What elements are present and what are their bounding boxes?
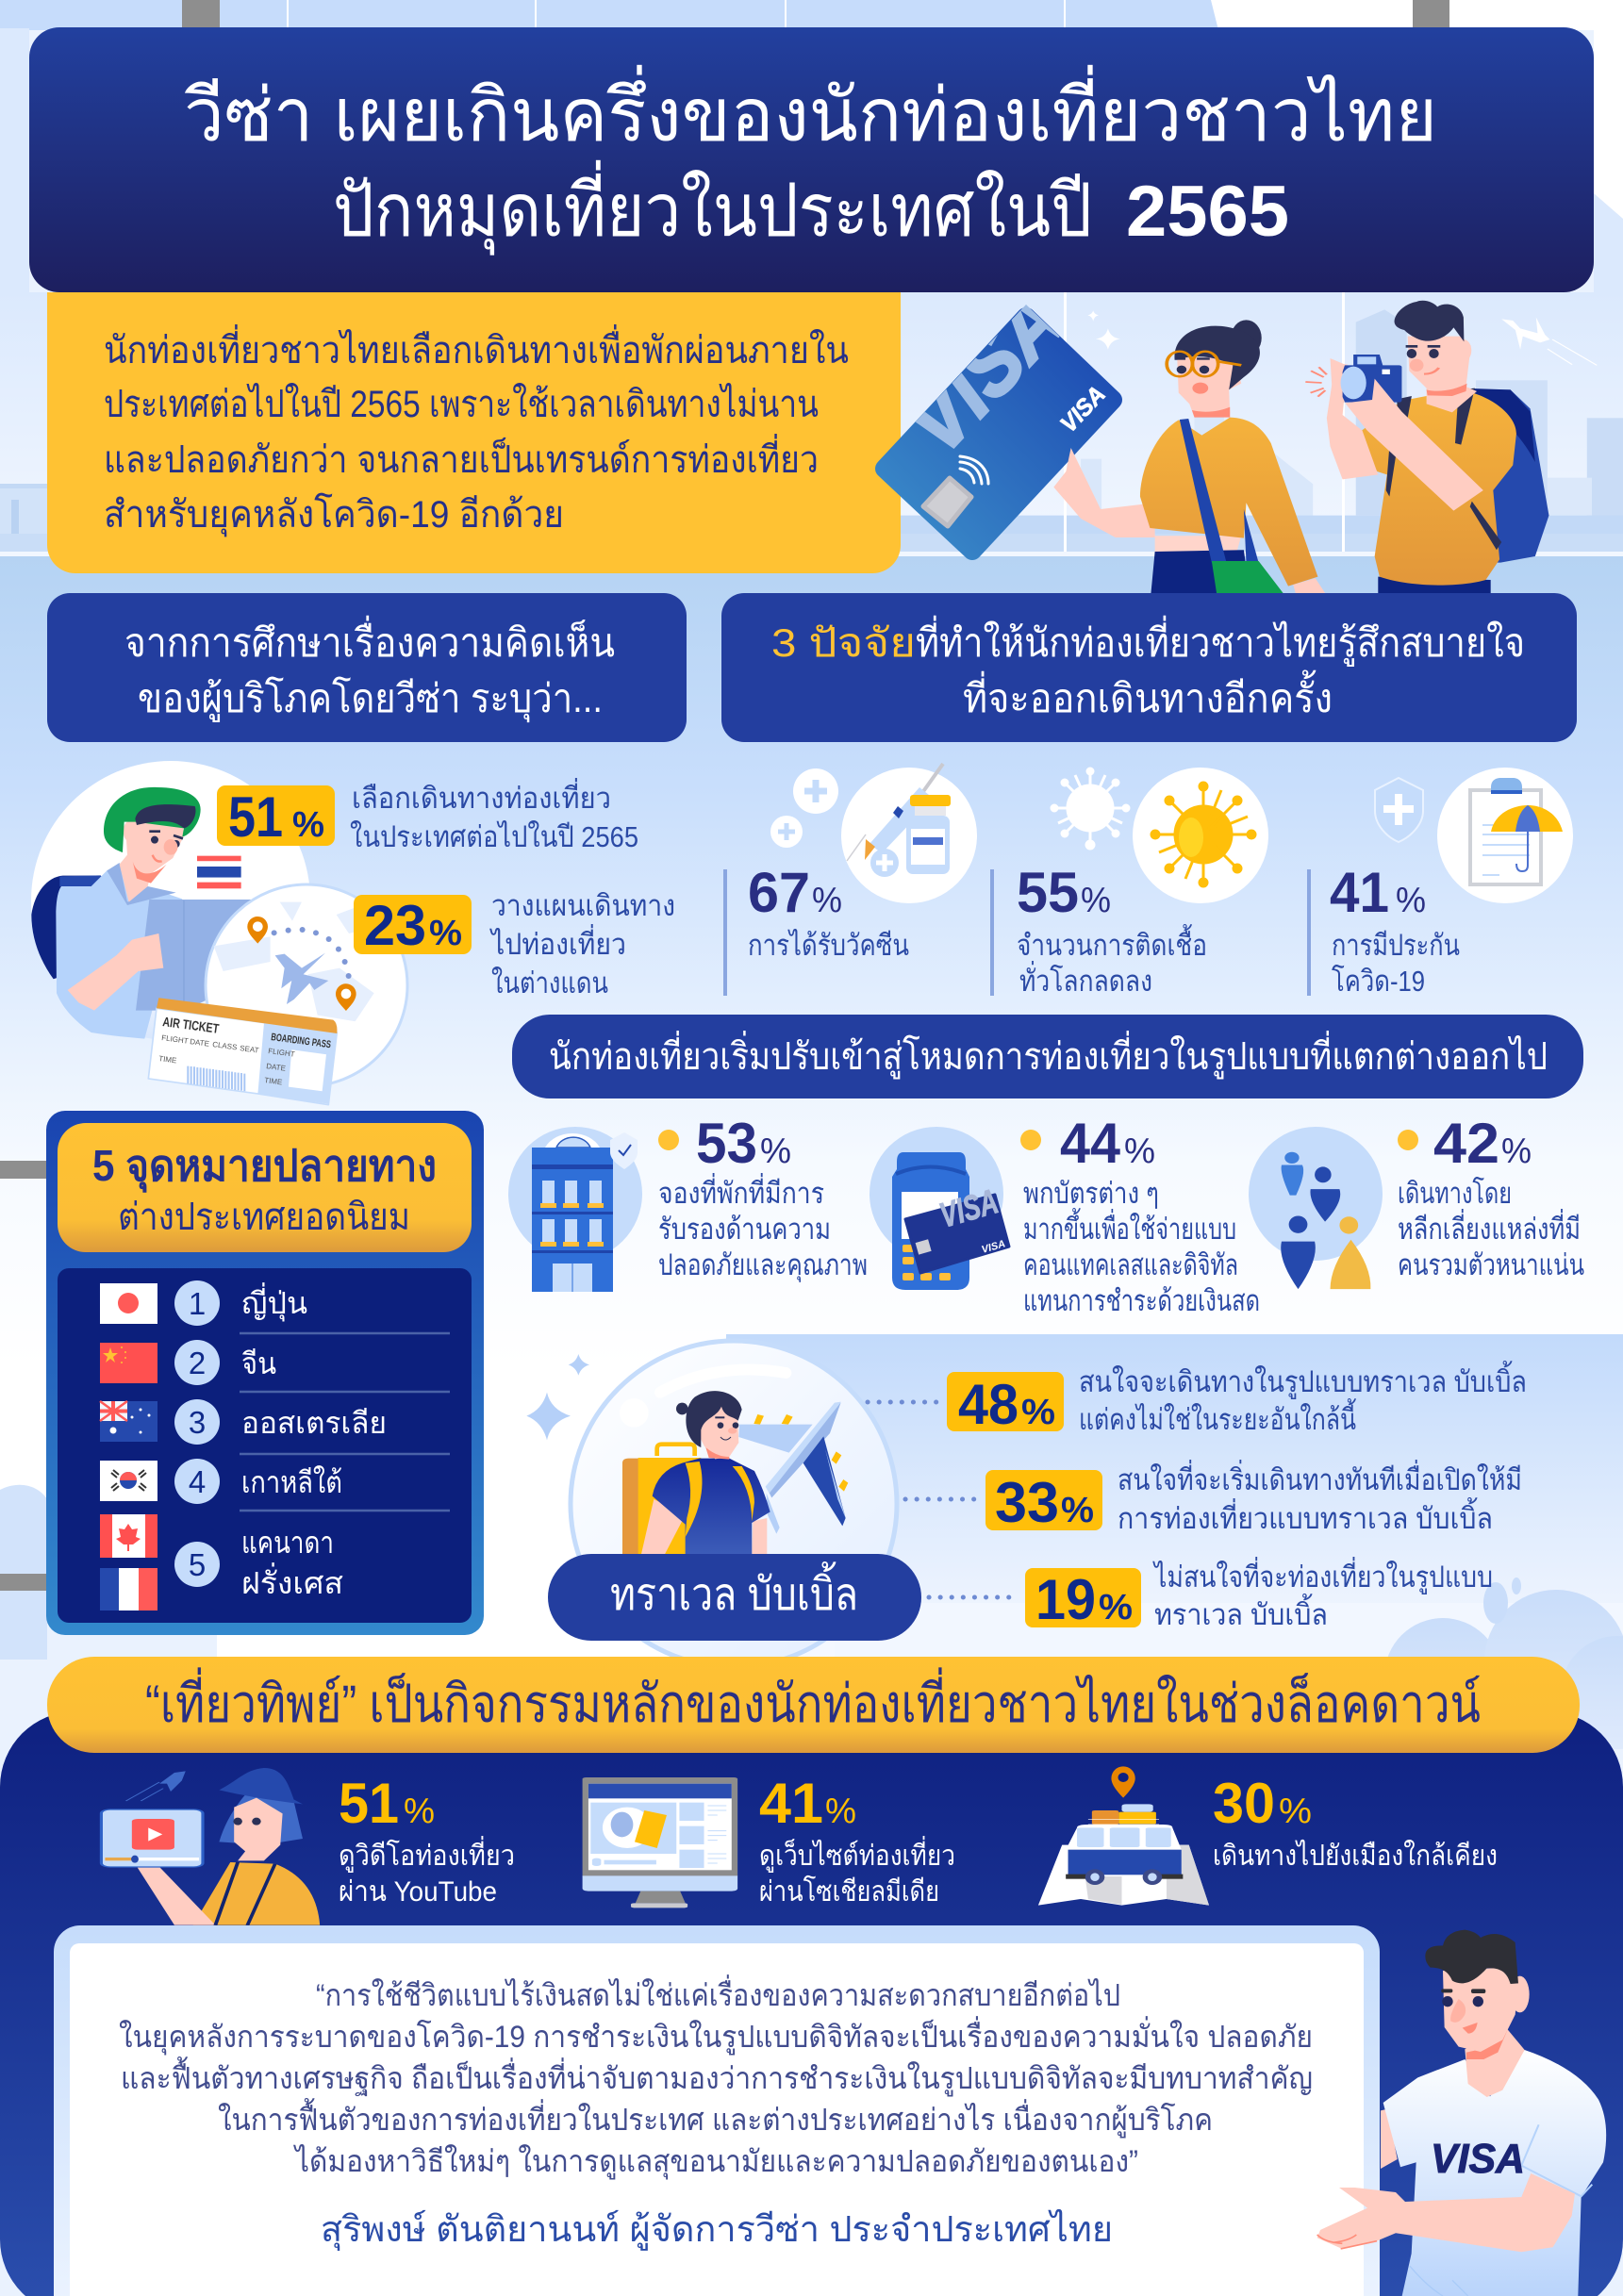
intro text: นักท่องเที่ยวชาวไทยเลือกเดินทางเพื่อพักผ่อนภายใน <box>104 324 849 372</box>
illustration: air ticket: SEAT <box>240 1044 259 1055</box>
label: travel bubble <box>548 1554 921 1641</box>
stat: 51% youtube: ดูวิดีโอท่องเที่ยว <box>339 1836 515 1873</box>
stat: 51% domestic <box>217 778 638 853</box>
illustration: air ticket: FLIGHT <box>161 1033 189 1046</box>
stat: 30% nearby cities: % <box>1279 1792 1312 1831</box>
stat: 33% immediately: สนใจที่จะเริ่มเดินทางทันทีเมื่อเปิดให้มี <box>1118 1460 1522 1496</box>
title year: 2565 <box>1126 172 1289 252</box>
rank 2: 2 <box>189 1346 206 1380</box>
quote text: และฟื้นตัวทางเศรษฐกิจ ถือเป็นเรื่องที่น่าจับตามองว่าการชำระเงินในรูปแบบดิจิทัลจะมีบทบาทสำคัญ <box>121 2056 1313 2097</box>
heading: 3 factors: 3 ปัจจัย <box>771 620 916 665</box>
illustration: air ticket: TIME <box>158 1054 177 1065</box>
card chip <box>923 478 971 526</box>
icon: van on map <box>1038 1766 1209 1906</box>
quote text: “การใช้ชีวิตแบบไร้เงินสดไม่ใช่แค่เรื่องของความสะดวกสบายอีกต่อไป <box>316 1974 1120 2012</box>
stat: 44% contactless: แทนการชำระด้วยเงินสด <box>1023 1284 1260 1317</box>
illustration: air ticket: BOARDING PASS <box>271 1032 332 1050</box>
stat: 19% not interested <box>929 1557 1493 1631</box>
title banner <box>29 27 1594 292</box>
stat: 53% certified stays: ปลอดภัยและคุณภาพ <box>658 1248 868 1283</box>
stat: 67% vaccinated: การได้รับวัคซีน <box>748 929 909 962</box>
icon: vaccine <box>770 764 977 903</box>
stat: 55% infections down <box>990 861 1207 998</box>
rank 4 <box>174 1459 220 1504</box>
icon: payment terminal <box>869 1127 1009 1290</box>
quote attribution: สุริพงษ์ ตันติยานนท์ ผู้จัดการวีซ่า ประจำประเทศไทย <box>321 2209 1113 2251</box>
quote text: ได้มองหาวิธีใหม่ๆ ในการดูแลสุขอนามัยและความปลอดภัยของตนเอง” <box>292 2144 1138 2180</box>
stat: 33% immediately: 33 <box>995 1471 1059 1534</box>
country names: ญี่ปุ่น <box>241 1282 307 1322</box>
country names: จีน <box>241 1346 276 1380</box>
icon: people distancing <box>1249 1127 1383 1289</box>
destinations heading <box>58 1123 472 1252</box>
icon: insurance <box>1375 768 1573 903</box>
stat: 44% contactless: มากขึ้นเพื่อใช้จ่ายแบบ <box>1023 1208 1236 1246</box>
stat: 51% domestic: ในประเทศต่อไปในปี 2565 <box>350 820 638 853</box>
stat: 55% infections down: จำนวนการติดเชื้อ <box>1017 924 1207 962</box>
icon: viruses <box>1051 768 1268 903</box>
destinations heading: 5 จุดหมายปลายทาง <box>92 1141 437 1193</box>
rank 4: 4 <box>189 1464 206 1499</box>
rank 5: 5 <box>189 1547 206 1582</box>
stat: 67% vaccinated <box>723 861 909 996</box>
icon: yellow virus <box>1151 782 1256 887</box>
quote text <box>119 1974 1313 2180</box>
panel: intro <box>47 292 901 573</box>
stat: 48% later: 48 <box>958 1373 1019 1436</box>
contactless waves <box>960 456 988 484</box>
stat: 42% avoid crowds: หลีกเลี่ยงแหล่งที่มี <box>1398 1209 1581 1246</box>
intro text <box>104 324 849 537</box>
intro text: และปลอดภัยกว่า จนกลายเป็นเทรนด์การท่องเที่ยว <box>104 434 819 481</box>
bottom navy panel <box>0 1711 1623 2296</box>
stat: 23% abroad: % <box>429 914 462 953</box>
stat: 42% avoid crowds: 42 <box>1433 1112 1499 1175</box>
stat: 55% infections down: 55 <box>1017 861 1079 924</box>
stat: 53% certified stays <box>658 1112 868 1283</box>
flag: France <box>100 1568 157 1611</box>
stat: 42% avoid crowds <box>1398 1112 1584 1281</box>
illustration: travel bubble <box>526 1341 897 1667</box>
icon: white virus <box>1051 768 1130 850</box>
stat: 51% youtube: % <box>404 1792 435 1831</box>
destinations list <box>58 1268 472 1623</box>
illustration: air ticket <box>148 998 337 1105</box>
icon: payment terminal: VISA <box>936 1181 1002 1235</box>
heading: consumer study: ของผู้บริโภคโดยวีซ่า ระบุว่า... <box>138 675 603 723</box>
illustration: visa presenter <box>1317 1930 1606 2296</box>
stat: 53% certified stays: 53 <box>696 1112 757 1175</box>
stat: 44% contactless: คอนแทคเลสและดิจิทัล <box>1023 1248 1238 1281</box>
flag: Australia <box>100 1401 157 1442</box>
stat: 41% websites: % <box>825 1792 856 1831</box>
intro text: ประเทศต่อไปในปี 2565 เพราะใช้เวลาเดินทางไม่นาน <box>104 382 819 425</box>
stat: 48% later: แต่คงไม่ใช่ในระยะอันใกล้นี้ <box>1079 1398 1356 1436</box>
stat: 30% nearby cities: เดินทางไปยังเมืองใกล้เคียง <box>1213 1839 1498 1872</box>
stat: 30% nearby cities <box>1213 1772 1498 1872</box>
panel: quote <box>54 1925 1380 2296</box>
illustration: woman with glasses <box>1053 320 1325 593</box>
country names: ฝรั่งเศส <box>241 1562 343 1600</box>
heading: virtual travel <box>47 1657 1580 1753</box>
rank 2 <box>174 1340 220 1385</box>
stat: 33% immediately: การท่องเที่ยวแบบทราเวล บับเบิ้ล <box>1118 1497 1493 1535</box>
stat: 53% certified stays: % <box>760 1131 791 1171</box>
stat: 51% domestic: % <box>292 805 324 845</box>
stat: 23% abroad <box>354 889 675 999</box>
stat: 51% youtube <box>339 1772 515 1908</box>
stat: 67% vaccinated: % <box>812 881 842 920</box>
flag: South Korea <box>100 1461 157 1501</box>
rank 1: 1 <box>189 1286 206 1321</box>
stat: 53% certified stays: รับรองด้านความ <box>658 1213 831 1246</box>
country names: แคนาดา <box>241 1526 334 1560</box>
person <box>641 1391 770 1554</box>
rank 5 <box>174 1542 220 1587</box>
stat: 51% youtube: ผ่าน YouTube <box>339 1876 497 1908</box>
stat: 41% websites: ดูเว็บไซต์ท่องเที่ยว <box>759 1836 955 1873</box>
title line 2: ปักหมุดเที่ยวในประเทศในปี <box>333 160 1092 256</box>
illustration: air ticket: CLASS <box>212 1040 238 1051</box>
card logo small: VISA <box>1055 381 1111 438</box>
rank 3 <box>174 1399 220 1445</box>
heading: consumer study: จากการศึกษาเรื่องความคิดเห็น <box>124 616 615 665</box>
rank 1 <box>174 1280 220 1326</box>
illustration: air ticket: DATE <box>266 1062 286 1073</box>
quote text: ในยุคหลังการระบาดของโควิด-19 การชำระเงินในรูปแบบดิจิทัลจะเป็นเรื่องของความมั่นใจ ปลอดภัย <box>119 2016 1313 2056</box>
illustration: visa card <box>885 271 1113 551</box>
stat: 67% vaccinated: 67 <box>748 861 810 924</box>
stat: 55% infections down: ทั่วโลกลดลง <box>1019 961 1152 998</box>
stat: 51% domestic: เลือกเดินทางท่องเที่ยว <box>352 778 611 815</box>
icon: payment terminal: VISA <box>981 1238 1007 1256</box>
backpack <box>622 1445 701 1554</box>
stat: 42% avoid crowds: % <box>1501 1131 1532 1171</box>
illustration: air ticket: DATE <box>190 1037 209 1049</box>
flag: China <box>100 1343 157 1383</box>
panel: top 5 destinations <box>46 1111 484 1635</box>
icon: hotel <box>508 1127 642 1292</box>
illustration: man with camera <box>1305 301 1548 593</box>
rank 3: 3 <box>189 1405 206 1440</box>
stat: 41% insurance: การมีประกัน <box>1332 929 1460 962</box>
illustration: air ticket: AIR TICKET <box>162 1014 221 1036</box>
stat: 41% websites <box>759 1772 955 1908</box>
stat: 44% contactless: % <box>1124 1131 1155 1171</box>
stat: 23% abroad: ไปท่องเที่ยว <box>489 924 626 961</box>
stat: 19% not interested: ทราเวล บับเบิ้ล <box>1154 1594 1328 1631</box>
quote text: ในการฟื้นตัวของการท่องเที่ยวในประเทศ และต่างประเทศอย่างไร เนื่องจากผู้บริโภค <box>218 2098 1213 2139</box>
stat: 41% insurance: โควิด-19 <box>1332 965 1425 998</box>
flag: Thailand <box>197 856 241 888</box>
stat: 23% abroad: ในต่างแดน <box>491 966 608 999</box>
illustration: air ticket: FLIGHT <box>268 1047 295 1059</box>
icon: woman watching video <box>101 1768 320 1925</box>
stat: 19% not interested: ไม่สนใจที่จะท่องเที่ยวในรูปแบบ <box>1151 1557 1493 1594</box>
stat: 23% abroad: วางแผนเดินทาง <box>491 889 675 922</box>
country names: ออสเตรเลีย <box>241 1406 387 1440</box>
stat: 41% insurance: % <box>1396 881 1426 920</box>
stat: 44% contactless: พกบัตรต่าง ๆ <box>1023 1177 1159 1210</box>
flag: Canada <box>100 1514 157 1558</box>
card logo large: VISA <box>886 271 1084 471</box>
stat: 23% abroad: 23 <box>364 894 426 957</box>
intro text: สำหรับยุคหลังโควิด-19 อีกด้วย <box>104 493 564 537</box>
stat: 51% domestic: 51 <box>228 785 283 849</box>
stat: 48% later <box>868 1361 1527 1436</box>
country names <box>241 1282 387 1600</box>
stat: 19% not interested: 19 <box>1035 1568 1096 1631</box>
icon: plane and sparkles in window <box>1087 310 1597 365</box>
stat: 53% certified stays: จองที่พักที่มีการ <box>658 1173 824 1210</box>
heading: new travel mode <box>512 1015 1583 1098</box>
heading: 3 factors <box>721 593 1577 742</box>
stat: 19% not interested: % <box>1099 1588 1133 1627</box>
stat: 44% contactless <box>1020 1112 1260 1317</box>
title line 1: วีซ่า เผยเกินครึ่งของนักท่องเที่ยวชาวไทย <box>184 65 1437 157</box>
stat: 33% immediately: % <box>1061 1491 1094 1530</box>
flag: Japan <box>100 1283 157 1324</box>
plane <box>738 1402 848 1534</box>
shirt logo: VISA <box>1431 2136 1525 2182</box>
stat: 48% later: สนใจจะเดินทางในรูปแบบทราเวล บับเบิ้ล <box>1079 1361 1527 1399</box>
stat: 48% later: % <box>1021 1393 1055 1432</box>
heading: 3 factors: ที่จะออกเดินทางอีกครั้ง <box>963 669 1333 720</box>
heading: consumer study <box>47 593 687 742</box>
stat: 33% immediately <box>905 1460 1522 1535</box>
stat: 41% websites: 41 <box>759 1772 823 1835</box>
illustration: traveller with map <box>31 761 310 1040</box>
label: travel bubble: ทราเวล บับเบิ้ล <box>610 1561 858 1620</box>
destinations heading: ต่างประเทศยอดนิยม <box>118 1197 410 1238</box>
stat: 42% avoid crowds: เดินทางโดย <box>1398 1177 1512 1210</box>
stat: 51% youtube: 51 <box>339 1772 399 1835</box>
stat: 55% infections down: % <box>1081 881 1111 920</box>
illustration: globe with route <box>206 884 407 1086</box>
stat: 41% insurance: 41 <box>1330 861 1389 924</box>
icon: desktop monitor <box>583 1777 737 1908</box>
stat: 44% contactless: 44 <box>1060 1112 1121 1175</box>
small visa card <box>905 1195 1009 1273</box>
country names: เกาหลีใต้ <box>241 1465 342 1499</box>
illustration: air ticket: TIME <box>264 1076 283 1086</box>
stat: 41% insurance <box>1307 861 1460 998</box>
stat: 41% websites: ผ่านโซเชียลมีเดีย <box>759 1875 939 1908</box>
stat: 30% nearby cities: 30 <box>1213 1772 1275 1835</box>
heading: 3 factors: ที่ทำให้นักท่องเที่ยวชาวไทยรู้สึกสบายใจ <box>916 616 1525 667</box>
